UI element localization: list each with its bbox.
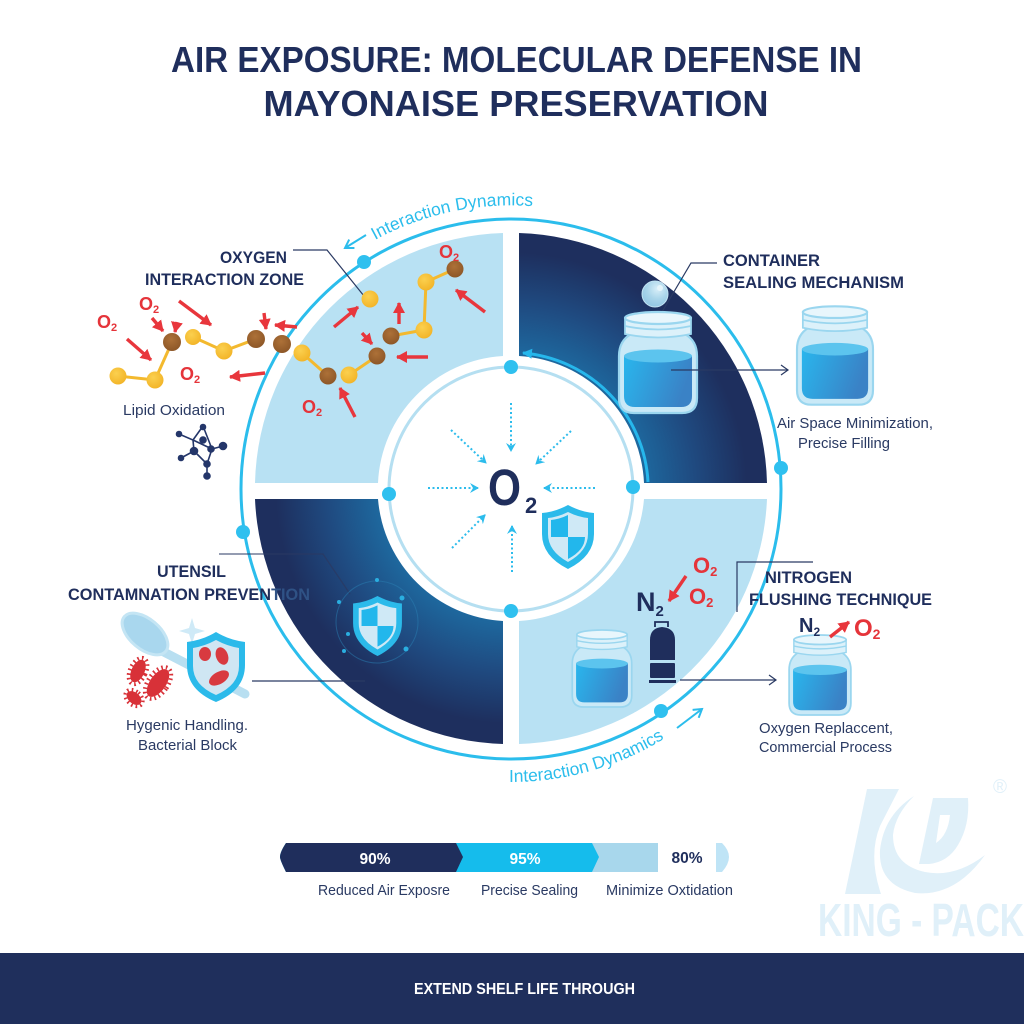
nitrogen exchange in quadrant: 2 <box>710 564 717 579</box>
footer band <box>0 953 1024 1024</box>
red O2 labels: O <box>139 294 153 314</box>
nitrogen exchange in quadrant: 2 <box>706 595 713 610</box>
watermark logo: King-Pack: ® <box>993 777 1007 798</box>
nitrogen exchange in quadrant <box>636 553 717 620</box>
icon: jar, air space minimization <box>797 306 873 405</box>
text: lipid oxidation: Lipid Oxidation <box>123 403 225 419</box>
red O2 labels: O <box>439 242 453 262</box>
panel: oxygen interaction zone quadrant <box>255 233 503 483</box>
icon: spoon <box>115 605 245 694</box>
progress bar <box>280 843 729 872</box>
icon: nitrogen cylinder <box>649 622 676 683</box>
icon: center shield <box>542 505 594 569</box>
nitrogen out, oxygen label: 2 <box>873 626 881 642</box>
icon: jar in sealing quadrant <box>619 312 697 413</box>
outer ring <box>241 219 781 759</box>
nitrogen out, oxygen label: O <box>854 615 873 642</box>
red O2 labels: 2 <box>111 322 117 334</box>
icon: shield in utensil quadrant <box>336 578 418 663</box>
leader line: shield to quadrant <box>252 680 365 682</box>
red O2 labels: O <box>97 312 111 332</box>
interaction dynamics label top: Interaction Dynamics <box>370 192 532 240</box>
nitrogen exchange in quadrant: O <box>689 584 706 609</box>
heading: utensil contamination prevention: UTENSIL <box>157 562 226 581</box>
progress labels: Minimize Oxtidation <box>606 883 733 899</box>
leader line: utensil <box>219 554 350 594</box>
leader line: oxygen <box>293 250 364 296</box>
nitrogen exchange in quadrant: 2 <box>656 603 664 620</box>
icon: molecule network <box>176 424 226 479</box>
nitrogen out, oxygen label <box>799 615 881 642</box>
inner light ring <box>389 367 633 611</box>
heading: oxygen interaction zone <box>145 248 304 289</box>
panel: container sealing quadrant <box>519 233 767 483</box>
interaction dynamics label bottom: Interaction Dynamics <box>510 732 663 782</box>
nitrogen out, oxygen label: 2 <box>813 625 820 639</box>
center: O2 with converging arrows: 2 <box>525 493 537 518</box>
arrow: cylinder to jar <box>680 679 776 681</box>
title <box>171 39 862 124</box>
arrow: jar to jar <box>671 369 788 371</box>
leader line: container <box>662 263 717 312</box>
red oxygen arrows <box>127 290 485 417</box>
icon: jar, oxygen replacement <box>789 635 851 715</box>
lipid molecule chain <box>110 260 464 388</box>
red O2 labels: 2 <box>194 374 200 386</box>
red O2 labels: 2 <box>316 407 322 419</box>
heading: nitrogen flushing technique: NITROGEN <box>765 568 852 587</box>
title: MAYONAISE PRESERVATION <box>264 83 768 124</box>
text: hygienic handling: Bacterial Block <box>138 738 238 754</box>
progress labels: Reduced Air Exposre <box>318 883 450 899</box>
progress labels: Precise Sealing <box>481 883 578 899</box>
progress bar: 80% <box>671 850 703 867</box>
red O2 labels: O <box>180 364 194 384</box>
red O2 labels: O <box>302 397 316 417</box>
icon: bubble <box>642 281 668 307</box>
panel: utensil contamination quadrant <box>255 499 503 744</box>
red O2 labels: 2 <box>153 304 159 316</box>
heading: container sealing mechanism: SEALING MECHANISM <box>723 273 904 292</box>
title: AIR EXPOSURE: MOLECULAR DEFENSE IN <box>171 39 862 80</box>
text: air space minimization <box>777 416 933 452</box>
nitrogen out, oxygen label: N <box>799 615 813 637</box>
heading: container sealing mechanism: CONTAINER <box>723 251 820 270</box>
text: oxygen replacement <box>759 721 893 756</box>
progress labels <box>318 883 733 899</box>
icon: jar in nitrogen quadrant <box>572 630 632 707</box>
heading: nitrogen flushing technique <box>749 568 932 609</box>
text: hygienic handling: Hygenic Handling. <box>126 718 248 734</box>
leader line: nitrogen <box>737 562 813 612</box>
text: air space minimization: Air Space Minimization, <box>777 416 933 432</box>
red O2 labels <box>97 242 459 419</box>
nitrogen exchange in quadrant: N <box>636 587 656 617</box>
icon: bacteria <box>122 655 177 710</box>
text: hygienic handling <box>126 718 248 754</box>
icon: shield with bacteria <box>187 632 245 702</box>
center: O2 with converging arrows <box>428 403 595 572</box>
nitrogen exchange in quadrant: O <box>693 553 710 578</box>
heading: oxygen interaction zone: OXYGEN <box>220 248 287 267</box>
heading: container sealing mechanism <box>723 251 904 292</box>
footer text: EXTEND SHELF LIFE THROUGH <box>414 981 635 998</box>
heading: utensil contamination prevention: CONTAMNATION PREVENTION <box>68 585 310 604</box>
ring nodes <box>236 255 788 718</box>
cyan arc in sealing quadrant <box>523 353 648 482</box>
text: oxygen replacement: Commercial Process <box>759 740 892 756</box>
heading: utensil contamination prevention <box>68 562 310 604</box>
progress bar: 90% <box>359 851 391 868</box>
center: O2 with converging arrows: O <box>488 459 521 516</box>
panel: nitrogen flushing quadrant <box>519 499 767 744</box>
heading: nitrogen flushing technique: FLUSHING TECHNIQUE <box>749 590 932 609</box>
heading: oxygen interaction zone: INTERACTION ZONE <box>145 270 304 289</box>
text: air space minimization: Precise Filling <box>798 436 890 452</box>
progress bar: 95% <box>509 851 541 868</box>
watermark logo: King-Pack <box>818 777 1024 946</box>
text: oxygen replacement: Oxygen Replaccent, <box>759 721 893 737</box>
interaction dynamics label bottom <box>510 708 704 782</box>
red O2 labels: 2 <box>453 252 459 264</box>
